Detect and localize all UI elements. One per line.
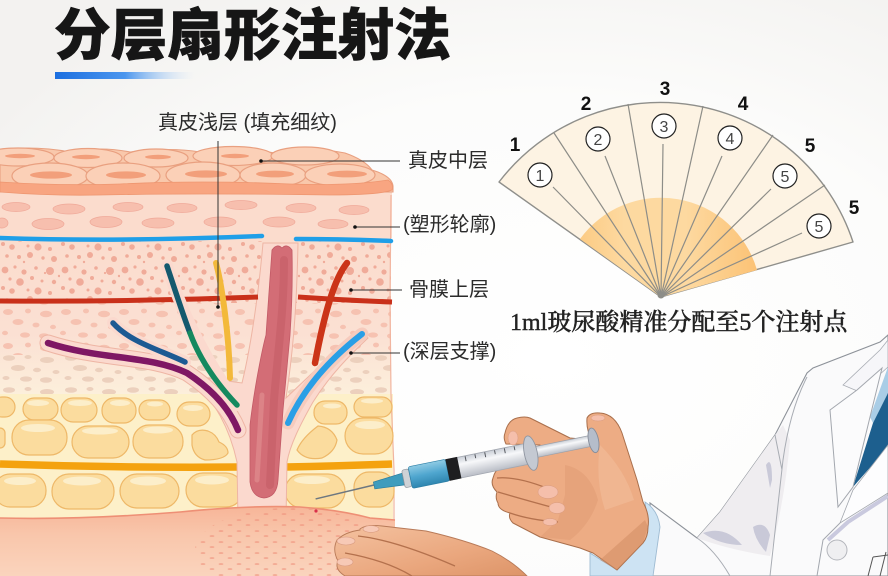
coat lapel left <box>830 368 882 507</box>
needle <box>315 485 374 499</box>
panel: skin cross-section <box>0 146 394 524</box>
red line: periosteum <box>0 297 392 302</box>
label: contour shaping: (塑形轮廓) <box>403 213 496 236</box>
light blue vessel <box>288 334 362 423</box>
fan point 5 lower <box>807 214 831 238</box>
orange fascia band <box>0 464 392 467</box>
label: deep support <box>349 340 496 363</box>
icon: doctor coat <box>590 335 888 576</box>
barrel flange <box>521 435 541 472</box>
label: superficial dermis <box>158 111 337 309</box>
fan point 5 upper: 5 <box>781 169 790 186</box>
red vessel <box>315 263 347 363</box>
fan outer numbers: 2 <box>581 94 591 115</box>
label: supraperiosteal layer: 骨膜上层 <box>409 278 489 301</box>
label: mid dermis: 真皮中层 <box>408 149 488 172</box>
fan outer numbers: 4 <box>738 94 749 115</box>
fan radial lines <box>553 104 825 297</box>
fan inner sector <box>580 198 757 297</box>
shirt <box>870 367 888 423</box>
sleeve shade <box>697 425 790 556</box>
scale ticks <box>465 446 515 461</box>
button <box>827 540 847 560</box>
orange epidermis band <box>0 180 392 195</box>
layer: epidermis surface cells <box>0 146 393 195</box>
icon: supporting hand on skin <box>335 525 527 576</box>
lapel shadow <box>828 496 888 540</box>
coat seams <box>697 377 807 576</box>
fan diagram <box>499 79 860 298</box>
plunger rod <box>530 435 595 458</box>
tie <box>853 393 888 487</box>
collar <box>843 340 888 392</box>
rubber stopper <box>445 457 461 481</box>
fan point 1: 1 <box>536 168 545 185</box>
label: supraperiosteal layer <box>349 278 489 301</box>
caption: 1ml玻尿酸精准分配至5个注射点 <box>510 309 848 336</box>
label: mid dermis <box>259 149 488 172</box>
yellow vessel <box>216 263 230 378</box>
fingers <box>497 478 562 522</box>
layer: dermis cells <box>0 200 369 230</box>
fan point 3: 3 <box>660 119 669 136</box>
pink central channel <box>190 243 368 520</box>
dark blue vessel <box>113 323 185 362</box>
green vessel <box>167 266 238 405</box>
purple vessel <box>48 343 238 430</box>
fan point 5 lower: 5 <box>815 219 824 236</box>
coat lapel right <box>840 445 888 523</box>
fan outer numbers: 5 <box>849 198 860 219</box>
central artery <box>250 246 292 498</box>
injection vessels <box>48 263 362 430</box>
plunger flange <box>586 427 601 454</box>
title underline <box>55 72 195 79</box>
blue line: dermis boundary <box>0 236 391 241</box>
fan point 2 <box>586 127 610 151</box>
icon: hand holding syringe <box>492 413 648 570</box>
layer: fat cells <box>0 397 394 509</box>
label: contour shaping <box>353 213 496 236</box>
icon: syringe <box>312 422 602 514</box>
labels with leader lines <box>158 111 496 363</box>
fingernails <box>508 415 605 526</box>
fan outer numbers: 1 <box>510 135 521 156</box>
cuff <box>590 502 660 576</box>
hub <box>373 473 405 491</box>
panel: lower skin surface <box>0 507 395 576</box>
fan point 4: 4 <box>726 131 735 148</box>
fan point 1 <box>528 163 552 187</box>
fan point 5 upper <box>773 164 797 188</box>
label: superficial dermis: 真皮浅层 (填充细纹) <box>158 111 337 134</box>
fan point 3 <box>652 114 676 138</box>
fan outer numbers: 3 <box>660 79 670 100</box>
fat cell highlights <box>4 398 385 486</box>
fan point 4 <box>718 126 742 150</box>
title: 分层扇形注射法 <box>54 4 451 67</box>
layer: subcutaneous tissue and fat base <box>0 192 394 524</box>
fan outer numbers <box>510 79 860 219</box>
pocket <box>868 552 888 576</box>
barrel <box>441 443 533 481</box>
label: deep support: (深层支撑) <box>403 340 496 363</box>
fan point 2: 2 <box>594 132 603 149</box>
palm shading <box>540 465 598 540</box>
fan outer sector <box>499 102 853 297</box>
coat folds <box>703 462 772 552</box>
liquid <box>408 459 450 488</box>
fan outer numbers: 5 <box>805 136 816 157</box>
